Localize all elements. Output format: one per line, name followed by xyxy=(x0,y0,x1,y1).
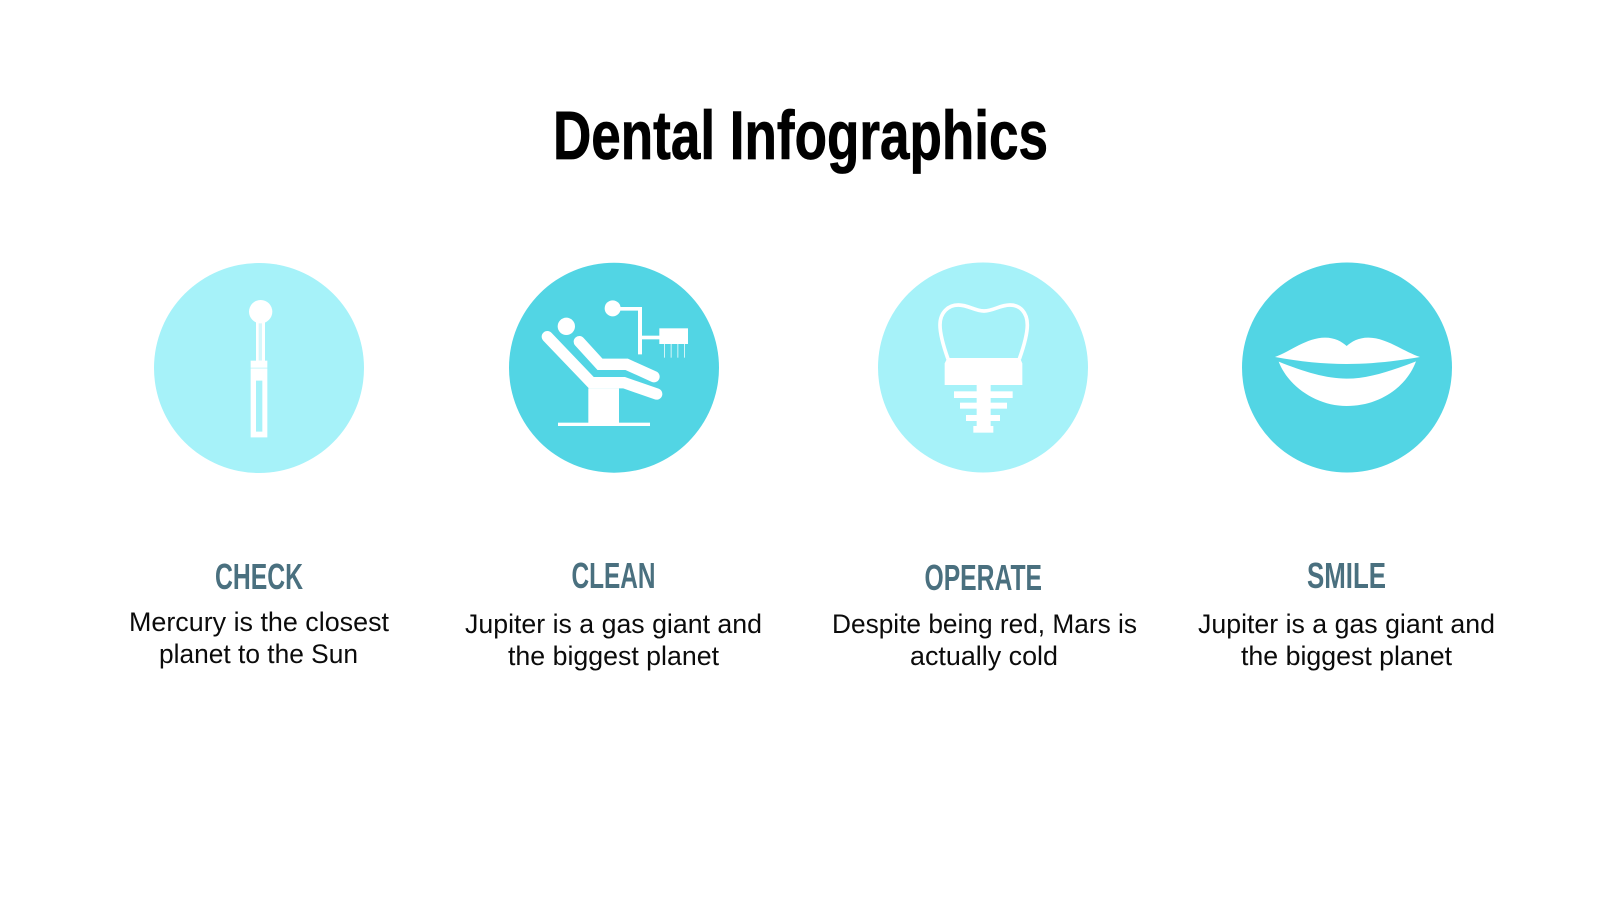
panel: check xyxy=(129,263,389,669)
text block: smile: Jupiter is a gas giant and xyxy=(1198,609,1495,639)
icon: smiling lips xyxy=(1242,262,1452,472)
text block: operate: actually cold xyxy=(910,641,1058,671)
text block: operate: Despite being red, Mars is xyxy=(832,609,1137,639)
text block: clean: the biggest planet xyxy=(508,641,719,671)
text block: smile: the biggest planet xyxy=(1241,641,1452,671)
text block: clean: Jupiter is a gas giant and xyxy=(465,609,762,639)
panel: smile xyxy=(1198,262,1495,671)
text block: clean xyxy=(465,609,762,671)
title: Dental Infographics xyxy=(553,97,1048,174)
heading: check: CHECK xyxy=(215,556,303,597)
text block: smile xyxy=(1198,609,1495,671)
icon: dental mirror xyxy=(154,263,364,473)
panel: operate xyxy=(832,262,1137,671)
text block: check: Mercury is the closest xyxy=(129,607,389,637)
heading: clean: CLEAN xyxy=(572,555,656,596)
text block: operate xyxy=(832,609,1137,671)
panel: clean xyxy=(465,263,762,671)
heading: smile: SMILE xyxy=(1307,555,1386,596)
text block: check: planet to the Sun xyxy=(159,639,358,669)
heading: operate: OPERATE xyxy=(924,557,1042,598)
text block: check xyxy=(129,607,389,669)
icon: dental implant xyxy=(878,262,1088,472)
icon: dental chair xyxy=(509,263,719,473)
